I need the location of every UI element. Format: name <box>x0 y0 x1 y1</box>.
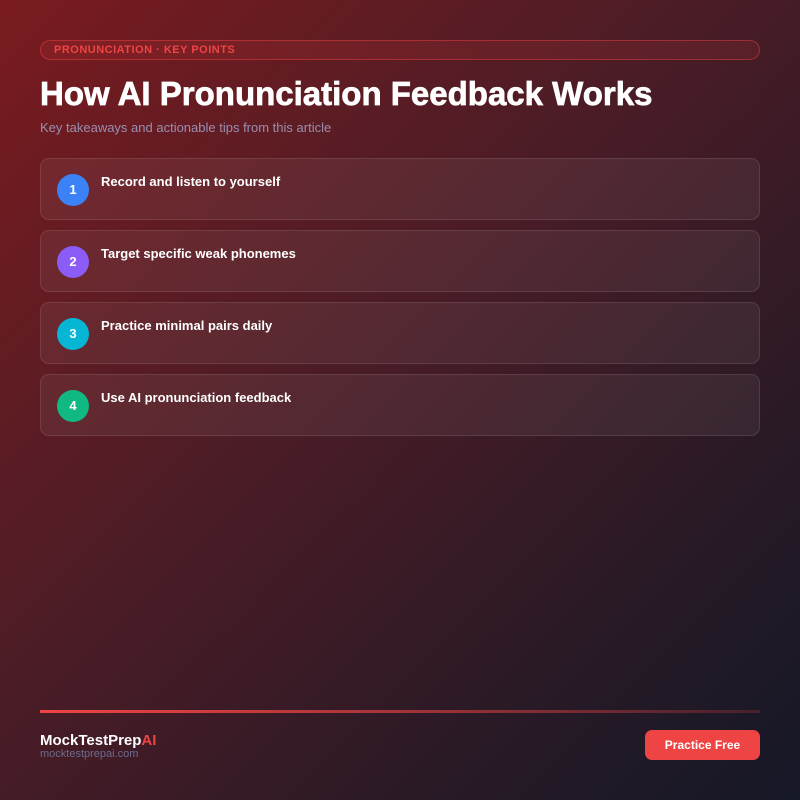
button: Practice Free <box>665 738 740 752</box>
text 1: Record and listen to yourself <box>101 174 280 189</box>
badge 1 <box>57 174 89 206</box>
badge 2 <box>57 246 89 278</box>
subtitle: Key takeaways and actionable tips from this article <box>40 120 331 135</box>
text 3: Practice minimal pairs daily <box>101 318 272 333</box>
tag pill: PRONUNCIATION · KEY POINTS <box>54 44 235 56</box>
badge 4: 4 <box>69 398 77 413</box>
card 1 <box>40 158 760 220</box>
button <box>645 730 760 760</box>
brand: MockTestPrepAI <box>40 732 156 749</box>
badge 4 <box>57 390 89 422</box>
badge 3: 3 <box>69 326 77 341</box>
card 4 <box>40 374 760 436</box>
text 2: Target specific weak phonemes <box>101 246 296 261</box>
tag pill <box>40 40 760 60</box>
badge 3 <box>57 318 89 350</box>
badge 1: 1 <box>69 182 77 197</box>
card 3 <box>40 302 760 364</box>
footer line <box>40 710 760 713</box>
badge 2: 2 <box>69 254 77 269</box>
title: How AI Pronunciation Feedback Works <box>40 75 652 112</box>
card 2 <box>40 230 760 292</box>
url: mocktestprepai.com <box>40 748 138 760</box>
text 4: Use AI pronunciation feedback <box>101 390 291 405</box>
